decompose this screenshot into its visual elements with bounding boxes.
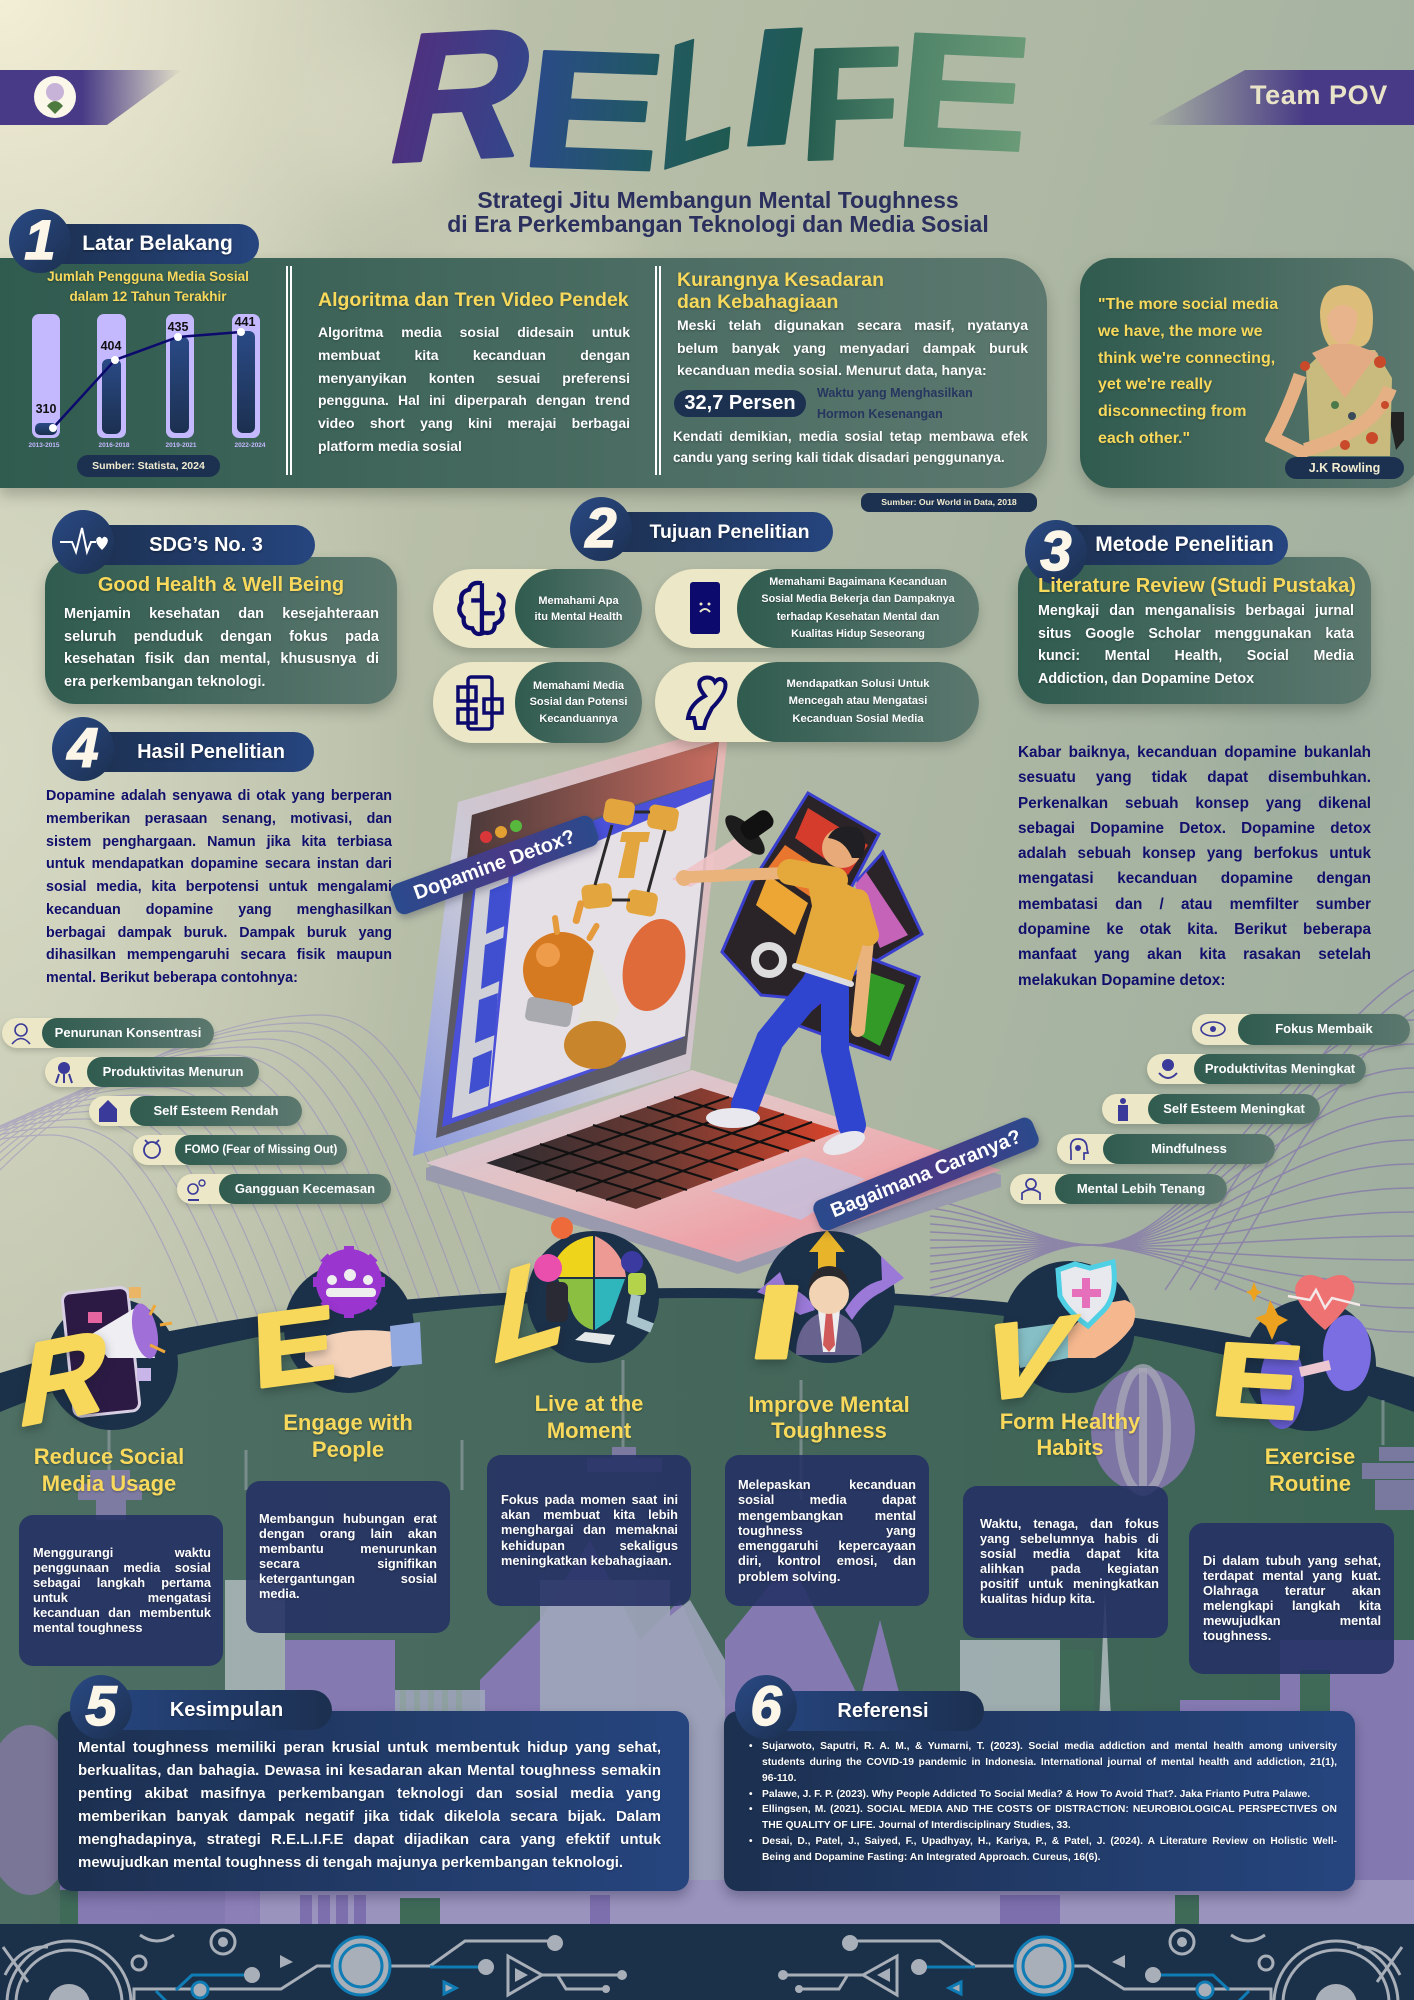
step heading: exercise xyxy=(1265,1444,1355,1496)
benefit pill 3: Self Esteem Meningkat xyxy=(1163,1101,1305,1116)
dopamine detox text: manfaat yang akan kita rasakan setelah xyxy=(1018,946,1371,963)
step text 2 xyxy=(259,1511,920,1606)
heading badge 1 xyxy=(40,224,259,264)
heading kesadaran: dan Kebahagiaan xyxy=(677,291,838,313)
step text 2: membantu menurunkan xyxy=(259,1541,437,1556)
negative effect pill 3: Self Esteem Rendah xyxy=(154,1103,278,1118)
icon: shield and hand xyxy=(1003,1261,1135,1393)
dopamine detox text: Kabar baiknya, kecanduan dopamine bukanlah xyxy=(1018,744,1371,761)
step text 2: media. xyxy=(259,1586,300,1601)
bar chart: social media users: 2022-2024 xyxy=(234,442,266,449)
step text 4: sosial media dapat xyxy=(738,1492,916,1507)
step heading: reduce xyxy=(34,1444,920,1606)
chart heading xyxy=(47,269,249,304)
step text 4: emenggaruhi kepercayaan xyxy=(738,1538,916,1553)
source pill our world in data: Sumber: Our World in Data, 2018 xyxy=(881,497,1017,507)
metode text: Addiction, dan Dopamine Detox xyxy=(1038,671,1254,687)
icon: arrows and professional xyxy=(757,1230,904,1363)
negative effect pill 4: FOMO (Fear of Missing Out) xyxy=(185,1144,337,1156)
step text 3: akan membuat kita lebih xyxy=(501,1507,678,1522)
step card 5 xyxy=(963,1486,1168,1638)
references list: Sujarwoto, Saputri, R. A. M., & Yumarni, T. (2023). Social media addiction and mental health among university xyxy=(762,1741,1337,1752)
text kendati xyxy=(673,429,1028,466)
title RELIFE: F xyxy=(796,14,906,195)
quote text: we have, the more we xyxy=(1098,323,1263,340)
bar chart: social media users: 435 xyxy=(168,320,188,334)
name pill: J.K Rowling xyxy=(1309,461,1380,475)
text algoritma: video short yang kini merajai berbagai xyxy=(318,415,630,431)
quote text: yet we're really xyxy=(1098,376,1212,393)
step heading: form: Form Healthy xyxy=(1000,1409,1140,1434)
objective card 1: Memahami Apa xyxy=(538,594,619,606)
step text 5: yang sebelumnya habis di xyxy=(980,1531,1159,1546)
bar chart: social media users: 2016-2018 xyxy=(98,442,130,449)
panel: referensi xyxy=(724,1711,1355,1891)
objective card 3 xyxy=(433,662,642,743)
heading kesadaran xyxy=(677,269,884,314)
text kesadaran: Meski telah digunakan secara masif, nyatanya xyxy=(677,317,1028,333)
benefit pill 2: Produktivitas Meningkat xyxy=(1205,1061,1355,1076)
decorative wave lines right xyxy=(930,970,1414,1332)
quote text: think we're connecting, xyxy=(1098,350,1275,367)
banner: Dopamine Detox: Dopamine Detox? xyxy=(411,826,578,904)
bar chart: social media users: 441 xyxy=(235,315,255,329)
name pill xyxy=(1285,457,1404,479)
heading badge 3: Metode Penelitian xyxy=(1095,533,1274,556)
RELIVE yellow letters xyxy=(12,1224,1309,1452)
negative effect pill 1 xyxy=(2,1018,214,1048)
objective card 4: Mencegah atau Mengatasi xyxy=(789,695,927,707)
objective card 2: Sosial Media Bekerja dan Dampaknya xyxy=(761,593,955,605)
step text 1: sebagai langkah pertama xyxy=(33,1575,211,1590)
decorative wave lines left xyxy=(0,1015,500,1410)
benefit pill 4: Mindfulness xyxy=(1151,1141,1227,1156)
step text 4: mengembangkan mental xyxy=(738,1508,916,1523)
stat caption: Hormon Kesenangan xyxy=(817,407,943,421)
kesimpulan text: berkualitas, dan bahagia. Dewasa ini kesadaran akan Mental toughness semakin xyxy=(78,1762,661,1779)
heading badge 4 xyxy=(82,732,314,772)
step text 6: Di dalam tubuh yang sehat, xyxy=(1203,1553,1381,1568)
second divider xyxy=(655,266,661,475)
icon: phone with megaphone xyxy=(46,1287,178,1430)
benefit pill 5 xyxy=(1010,1174,1227,1204)
step text 4: diri, kontrol emosi, dan xyxy=(738,1553,916,1568)
SDG pill xyxy=(83,525,315,565)
benefit pill 4 xyxy=(1057,1134,1275,1164)
dopamine detox text: adalah sebuah konsep yang berfokus untuk xyxy=(1018,845,1371,862)
divider pair xyxy=(286,266,292,475)
benefit pill 2 xyxy=(1147,1054,1366,1084)
heading badge 6 xyxy=(766,1691,984,1731)
step text 5: positif untuk meningkatkan xyxy=(980,1576,1159,1591)
source pill our world in data xyxy=(861,493,1037,512)
banner: logo left xyxy=(0,70,182,125)
text kesadaran: kecanduan media sosial. Menurut data, hanya: xyxy=(677,362,987,378)
bar chart: social media users xyxy=(28,314,266,449)
objective card 2: terhadap Kesehatan Mental dan xyxy=(777,610,939,622)
step heading: engage: Engage with xyxy=(283,1410,413,1435)
banner: Bagaimana Caranya: Bagaimana Caranya? xyxy=(828,1126,1024,1222)
references list: 96-110. xyxy=(762,1773,796,1784)
step text 4 xyxy=(738,1477,916,1585)
step heading: engage: People xyxy=(312,1437,384,1462)
step heading: form xyxy=(916,1409,1140,1606)
number 1 xyxy=(9,209,71,273)
objective card 3: Kecanduannya xyxy=(539,713,618,725)
text kesadaran: belum banyak yang menyadari dampak buruk xyxy=(677,340,1028,356)
step text 1: Menggurangi waktu xyxy=(33,1545,211,1560)
benefit pill 1 xyxy=(1192,1014,1410,1045)
negative effect pill 2: Produktivitas Menurun xyxy=(103,1064,243,1079)
stat pill 32,7 persen xyxy=(674,390,806,417)
number 3 xyxy=(1025,520,1087,584)
hasil text: Dopamine adalah senyawa di otak yang berperan xyxy=(46,788,392,804)
step text 5: Waktu, tenaga, dan fokus xyxy=(980,1516,1159,1531)
negative effect pill 3 xyxy=(89,1096,302,1126)
references list: Palawe, J. F. P. (2023). Why People Addicted To Social Media? & How To Avoid That?. Jaka Frianto Putra Palawe. xyxy=(762,1789,1310,1800)
step heading: live: Moment xyxy=(547,1418,631,1443)
objective card 3: Memahami Media xyxy=(533,680,624,692)
SDG text: seluruh penduduk dengan fokus pada xyxy=(64,629,379,645)
stat caption: Waktu yang Menghasilkan xyxy=(817,386,973,400)
reference bullets: • xyxy=(749,1741,753,1752)
quote text xyxy=(1098,296,1278,447)
icon: gear and handshake xyxy=(284,1246,422,1393)
step text 5 xyxy=(980,1516,1160,1606)
laptop illustration xyxy=(413,725,1001,1274)
references list: Ellingsen, M. (2021). SOCIAL MEDIA AND THE COSTS OF DISTRACTION: NEUROBIOLOGICAL PERSPECTIVES ON xyxy=(762,1804,1337,1815)
step heading: improve: Toughness xyxy=(771,1418,887,1443)
references list: students during the COVID-19 pandemic in Indonesia. International journal of mental health and addiction, 21(1), xyxy=(762,1757,1337,1768)
SDG text: era perkembangan teknologi. xyxy=(64,674,265,690)
hasil text: dihasilkan mempengaruhi secara fisik maupun xyxy=(46,947,392,963)
heading badge 2 xyxy=(600,512,833,552)
benefit pill 3 xyxy=(1102,1094,1320,1124)
number 5: 5 xyxy=(85,1674,117,1737)
text algoritma: platform media sosial xyxy=(318,438,462,454)
objective card 2 xyxy=(655,569,979,648)
metode text xyxy=(1038,603,1354,687)
RELIVE yellow letters: R xyxy=(12,1304,118,1452)
objective card 4 xyxy=(655,662,979,742)
text algoritma xyxy=(318,324,630,455)
panel: metode xyxy=(1018,557,1371,704)
text algoritma: pengguna. Hal ini diperparah dengan trend xyxy=(318,392,630,408)
heading badge 3 xyxy=(1055,525,1288,565)
negative effect pill 5 xyxy=(177,1174,391,1204)
heading badge 5: Kesimpulan xyxy=(170,1699,283,1721)
stat caption xyxy=(817,386,973,421)
objective card 2: Kualitas Hidup Seseorang xyxy=(791,628,925,640)
portrait xyxy=(1265,285,1404,457)
kesimpulan text: memberikan banyak dampak negatif jika tidak dikelola secara bijak. Dalam xyxy=(78,1808,661,1825)
number 1: 1 xyxy=(24,208,56,271)
heading badge 1: Latar Belakang xyxy=(82,232,233,255)
bar chart: social media users: 2019-2021 xyxy=(165,442,197,449)
dopamine detox text: dopamine ke otak kita. Berikut beberapa xyxy=(1018,921,1371,938)
panel: latar belakang xyxy=(0,258,1047,488)
negative effect pill 2 xyxy=(45,1057,259,1087)
step card 1 xyxy=(19,1515,223,1666)
references list: THE QUALITY OF LIFE. Journal of Interdisciplinary Studies, 33. xyxy=(762,1820,1071,1831)
objective card 2: Memahami Bagaimana Kecanduan xyxy=(769,576,947,588)
city skyline xyxy=(0,1360,1414,1924)
step text 3: Fokus pada momen saat ini xyxy=(501,1492,678,1507)
step text 6 xyxy=(1203,1553,1382,1644)
bar chart: social media users: 404 xyxy=(101,339,121,353)
step heading: live xyxy=(535,1391,920,1606)
banner: team right xyxy=(1145,70,1414,125)
heading badge 6: Referensi xyxy=(837,1700,929,1722)
step text 2: ketergantungan sosial xyxy=(259,1571,437,1586)
text algoritma: Algoritma media sosial didesain untuk xyxy=(318,324,630,340)
RELIVE yellow letters: I xyxy=(741,1264,812,1381)
SDG text xyxy=(64,606,380,690)
step text 1: penggunaan media sosial xyxy=(33,1560,211,1575)
banner: Dopamine Detox xyxy=(388,813,601,917)
grunge background patches xyxy=(290,50,1390,870)
step text 2: dengan orang lain akan xyxy=(259,1526,437,1541)
number 6 xyxy=(735,1675,797,1739)
panel: SDG xyxy=(45,557,397,704)
subtitle: Strategi Jitu Membangun Mental Toughness xyxy=(477,187,959,213)
objective card 4: Mendapatkan Solusi Untuk xyxy=(787,678,929,690)
step text 2: Membangun hubungan erat xyxy=(259,1511,437,1526)
number 5 xyxy=(70,1675,132,1739)
source pill statista xyxy=(77,455,220,477)
dopamine detox text: mengatasi kecanduan dopamine dengan xyxy=(1018,870,1371,887)
step text 4: problem solving. xyxy=(738,1569,840,1584)
hasil text: berbagai dampak buruk. Dampak buruk yang xyxy=(46,924,392,940)
step card 4 xyxy=(725,1455,929,1606)
step text 4: Melepaskan kecanduan xyxy=(738,1477,916,1492)
stat pill 32,7 persen: 32,7 Persen xyxy=(684,392,796,414)
references list: Desai, D., Patel, J., Saiyed, F., Upadhyay, H., Kariya, P., & Patel, J. (2024). A Literature Review on Holistic Well- xyxy=(762,1836,1337,1847)
step text 1 xyxy=(33,1456,920,1636)
panel: quote xyxy=(1080,258,1414,488)
step text 5: alihkan pada kegiatan xyxy=(980,1561,1159,1576)
step text 3 xyxy=(501,1492,678,1569)
step text 1: kecanduan dan membentuk xyxy=(33,1605,211,1620)
negative effect pill 4 xyxy=(133,1135,347,1165)
objective card 4: Kecanduan Sosial Media xyxy=(792,713,924,725)
RELIVE yellow letters: E xyxy=(250,1283,338,1410)
kesimpulan text xyxy=(78,1696,661,1872)
step text 4: toughness yang xyxy=(738,1523,916,1538)
benefit pill 5: Mental Lebih Tenang xyxy=(1077,1181,1205,1196)
icon: heart and dumbbell xyxy=(1244,1275,1376,1431)
step heading: exercise: Routine xyxy=(1269,1471,1351,1496)
references list xyxy=(762,1741,1337,1863)
step text 6: toughness. xyxy=(1203,1628,1271,1643)
RELIVE yellow letters: L xyxy=(484,1224,579,1392)
step card 3 xyxy=(487,1455,691,1606)
number 2 xyxy=(570,497,632,561)
dropper xyxy=(672,807,777,887)
benefit pill 1: Fokus Membaik xyxy=(1275,1021,1373,1036)
text kendati: Kendati demikian, media sosial tetap membawa efek xyxy=(673,429,1028,444)
number 4 xyxy=(52,717,114,781)
character xyxy=(676,826,868,1160)
step text 6: terdapat mental yang kuat. xyxy=(1203,1568,1381,1583)
step text 3: menghargai dan memaknai xyxy=(501,1522,678,1537)
metode heading: Literature Review (Studi Pustaka) xyxy=(1038,575,1356,597)
step heading: reduce: Media Usage xyxy=(42,1471,176,1496)
dopamine detox text: sesuatu yang tidak dapat disembuhkan. xyxy=(1018,769,1371,786)
SDG text: kesehatan fisik dan mental, khususnya di xyxy=(64,651,379,667)
dopamine detox text: Perkenalkan sebuah konsep yang dikenal xyxy=(1018,795,1371,812)
SDG icon badge xyxy=(52,510,114,574)
hasil text: sistem penghargaan. Namun jika kita terbiasa xyxy=(46,834,392,850)
step card 6 xyxy=(1189,1523,1394,1674)
reference bullets: • xyxy=(749,1789,753,1800)
hasil text: memberikan perasaan senang, motivasi, dan xyxy=(46,811,392,827)
reference bullets: • xyxy=(749,1836,753,1847)
SDG text: Menjamin kesehatan dan kesejahteraan xyxy=(64,606,379,622)
kesimpulan text: mewujudkan mental toughness di tengah majunya perkembangan teknologi. xyxy=(78,1854,623,1871)
heading badge 4: Hasil Penelitian xyxy=(137,741,285,763)
SDG pill: SDG’s No. 3 xyxy=(149,534,263,556)
kesimpulan text: menghadapinya, strategi R.E.L.I.F.E dapat dijadikan cara yang efektif untuk xyxy=(78,1831,661,1848)
metode text: situs Google Scholar menggunakan kata xyxy=(1038,626,1354,642)
references list: Being and Dopamine Fasting: An Integrated Approach. Cureus, 16(6). xyxy=(762,1852,1100,1863)
step heading: exercise: Exercise xyxy=(1265,1444,1355,1469)
negative effect pill 1: Penurunan Konsentrasi xyxy=(55,1025,201,1040)
metode text: Mengkaji dan menganalisis berbagai jurnal xyxy=(1038,603,1354,619)
banner: Bagaimana Caranya xyxy=(811,1115,1041,1233)
step heading: improve: Improve Mental xyxy=(748,1392,910,1417)
heading kesadaran: Kurangnya Kesadaran xyxy=(677,269,884,291)
quote text: disconnecting from xyxy=(1098,403,1246,420)
green dome with navy arc xyxy=(0,1288,1414,2000)
title RELIFE: E xyxy=(889,0,1039,186)
RELIVE yellow letters: V xyxy=(963,1292,1088,1426)
step text 2: secara signifikan xyxy=(259,1556,437,1571)
title RELIFE: E xyxy=(513,15,674,206)
team label: Team POV xyxy=(1250,80,1388,110)
subtitle: di Era Perkembangan Teknologi dan Media Sosial xyxy=(447,211,989,237)
subtitle xyxy=(447,187,989,237)
panel: kesimpulan xyxy=(58,1711,689,1891)
SDG heading: Good Health & Well Being xyxy=(98,574,344,596)
dopamine detox text: melakukan Dopamine detox: xyxy=(1018,972,1225,989)
step text 5: kualitas hidup kita. xyxy=(980,1591,1095,1606)
objective card 1 xyxy=(433,569,642,648)
hasil text: sosial media, kita berpotensi untuk mengalami xyxy=(46,879,392,895)
dopamine detox text xyxy=(1018,744,1372,989)
heading algoritma: Algoritma dan Tren Video Pendek xyxy=(318,289,629,311)
hasil text xyxy=(46,788,392,986)
number 3: 3 xyxy=(1040,519,1072,582)
metode text: kunci: Mental Health, Social Media xyxy=(1038,648,1354,664)
chart heading: Jumlah Pengguna Media Sosial xyxy=(47,269,249,284)
hasil text: kecanduan dopamine yang menghasilkan xyxy=(46,902,392,918)
step text 5: sosial media dapat kita xyxy=(980,1546,1159,1561)
hasil text: untuk mendapatkan dopamine secara instan dari xyxy=(46,856,392,872)
step text 1: mental toughness xyxy=(33,1620,142,1635)
step heading: reduce: Reduce Social xyxy=(34,1444,184,1469)
negative effect pill 5: Gangguan Kecemasan xyxy=(235,1181,375,1196)
RELIVE yellow letters: E xyxy=(1206,1321,1309,1442)
heading badge 5 xyxy=(101,1690,332,1730)
bar chart: social media users: 2013-2015 xyxy=(28,442,60,449)
step text 3: meningkatkan kebahagiaan. xyxy=(501,1553,672,1568)
step text 6: melengkapi langkah kita xyxy=(1203,1598,1381,1613)
step heading: form: Habits xyxy=(1036,1435,1104,1460)
text kesadaran xyxy=(677,317,1028,380)
step text 1: untuk mengatasi xyxy=(33,1590,211,1605)
device behind the character xyxy=(722,793,922,1059)
step heading: live: Live at the xyxy=(535,1391,643,1416)
dopamine detox text: membatasi dan / atau memfilter sumber xyxy=(1018,896,1371,913)
chart heading: dalam 12 Tahun Terakhir xyxy=(69,289,227,304)
step card 2 xyxy=(246,1481,450,1633)
number 4: 4 xyxy=(67,716,99,779)
text algoritma: membuat kita kecanduan dengan xyxy=(318,347,630,363)
step text 3: kehidupan sekaligus xyxy=(501,1538,678,1553)
kesimpulan text: penting akibat masifnya perkembangan teknologi dan sosial media yang xyxy=(78,1785,661,1802)
reference bullets xyxy=(749,1741,753,1847)
quote text: each other." xyxy=(1098,430,1190,447)
number 6: 6 xyxy=(750,1674,782,1737)
objective card 3: Sosial dan Potensi xyxy=(530,696,627,708)
dopamine detox text: sebagai Dopamine Detox. Dopamine detox xyxy=(1018,820,1371,837)
footer band with circuit pattern xyxy=(0,1924,1414,2000)
heading badge 2: Tujuan Penelitian xyxy=(650,521,810,543)
step heading: engage xyxy=(283,1410,920,1606)
hasil text: mental. Berikut beberapa contohnya: xyxy=(46,970,298,986)
step heading: improve xyxy=(748,1392,920,1606)
source pill statista: Sumber: Statista, 2024 xyxy=(92,460,205,472)
icon: puzzle and people xyxy=(527,1217,659,1363)
objective card 1: itu Mental Health xyxy=(534,610,622,622)
quote text: "The more social media xyxy=(1098,296,1278,313)
reference bullets: • xyxy=(749,1804,753,1815)
bar chart: social media users: 310 xyxy=(36,402,56,416)
kesimpulan text: Mental toughness memiliki peran krusial untuk membentuk hidup yang sehat, xyxy=(78,1739,661,1756)
step text 6: Olahraga teratur akan xyxy=(1203,1583,1381,1598)
step text 6: mewujudkan mental xyxy=(1203,1613,1381,1628)
text kendati: candu yang sering kali tidak disadari penggunanya. xyxy=(673,450,1005,465)
title RELIFE xyxy=(372,0,1039,209)
text algoritma: menyanyikan konten sesuai preferensi xyxy=(318,370,630,386)
number 2: 2 xyxy=(585,496,617,559)
